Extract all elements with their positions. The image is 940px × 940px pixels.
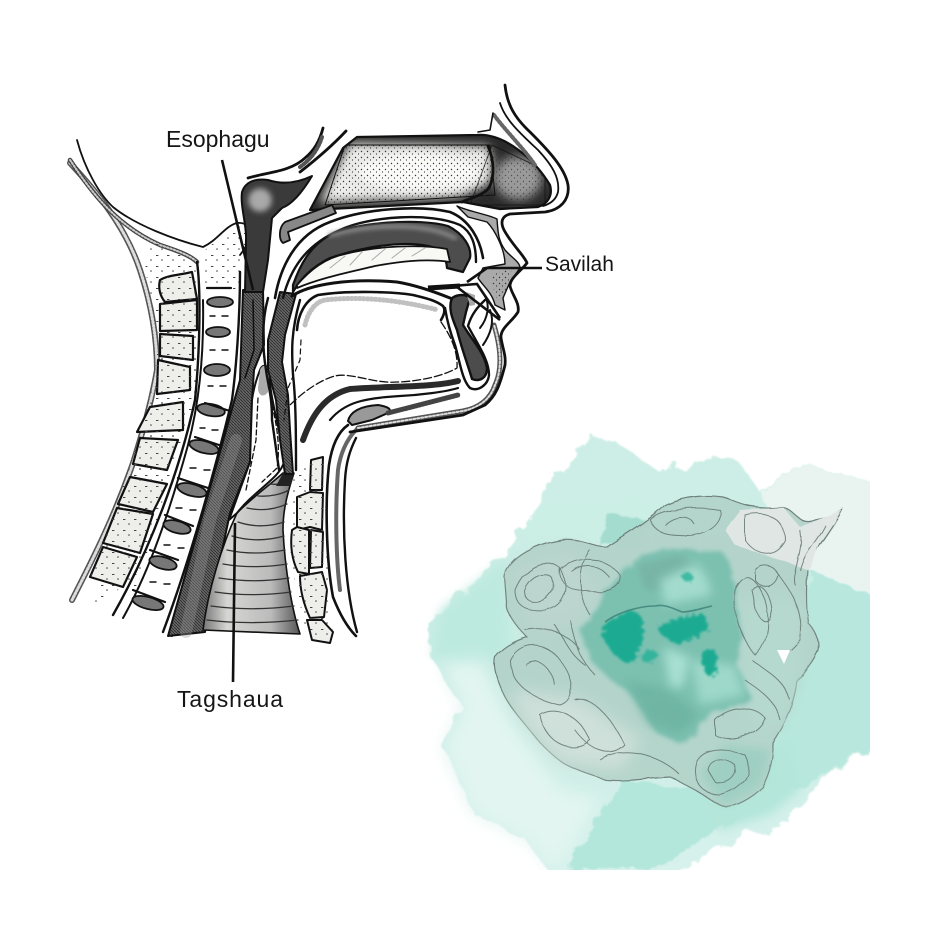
laryngeal cartilages [291, 457, 333, 643]
stippled fatty tissue behind neck [92, 240, 200, 610]
label: Tagshaua with leader line: Tagshaua [177, 686, 283, 712]
label: Savilah with leader lines: Savilah [545, 253, 614, 276]
trachea with cartilage rings [203, 473, 300, 634]
central darker cavity [580, 549, 750, 742]
tongue outline [284, 281, 457, 420]
pharyngeal dark column [263, 292, 300, 474]
pencil tissue outlines [510, 508, 825, 795]
watercolor illustration [430, 437, 880, 880]
mouth floor bands [303, 325, 500, 440]
label: Esophagu with leader line: Esophagu [166, 126, 270, 152]
upper lip philtrum stippled [457, 206, 520, 310]
bright teal core [603, 573, 717, 676]
epiglottis and white airway [229, 366, 284, 520]
face profile outline [350, 85, 568, 432]
label: Savilah with leader lines [428, 253, 614, 320]
teal wash background [430, 437, 880, 880]
nasopharynx blob [242, 176, 312, 292]
label: Esophagu with leader line [166, 126, 270, 290]
gray translucent tissue mass [494, 496, 842, 807]
spinal cord canal lines [113, 262, 246, 636]
dark lip and gum region [445, 292, 492, 389]
white highlight [777, 650, 790, 664]
intervertebral discs [131, 288, 233, 613]
anatomical diagram: head and neck cross-section [70, 85, 568, 643]
esophagus column [168, 290, 264, 636]
anterior neck contour [327, 425, 357, 636]
core dark edge [605, 605, 712, 622]
soft palate dark band [293, 222, 470, 292]
upper airway arcs [248, 128, 483, 298]
posterior neck and skull contours [70, 140, 250, 600]
hard palate lens [297, 246, 450, 288]
vertebral bodies [90, 272, 197, 587]
nasal cavity with stippled fill [308, 134, 552, 212]
